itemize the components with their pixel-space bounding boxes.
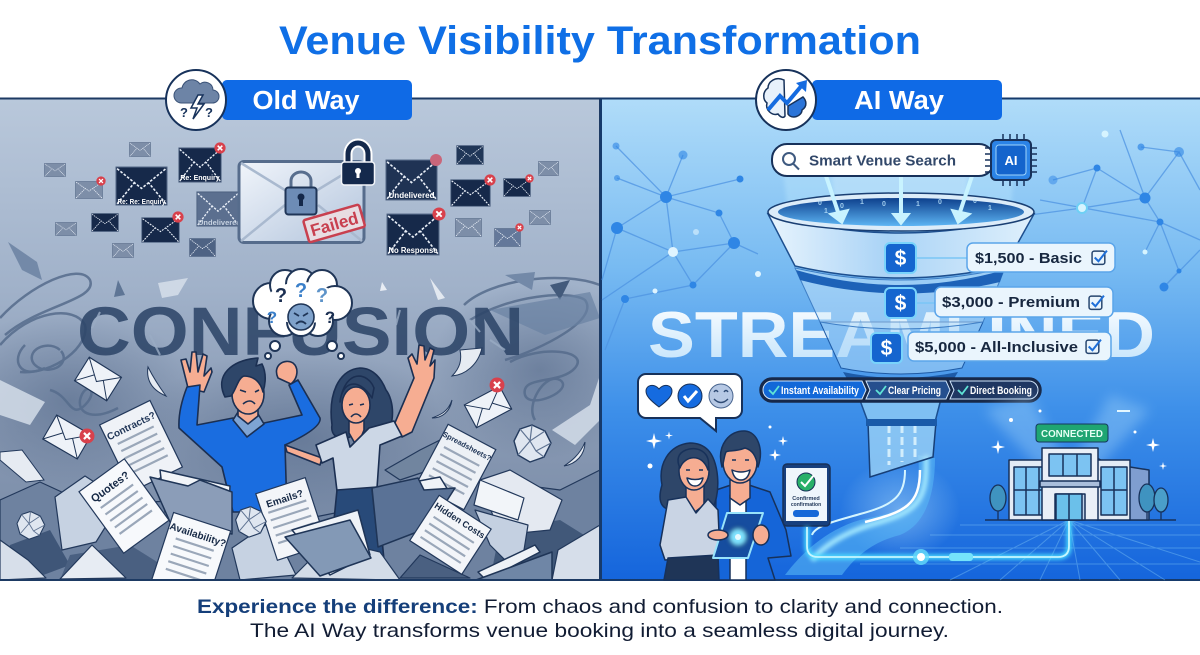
document: Emails?: Emails? — [265, 488, 305, 511]
document: Emails? — [256, 478, 327, 560]
price tier: Basic — [885, 243, 1115, 273]
badge: ai way: AI Way — [854, 87, 945, 115]
labelled envelope: Re: Re: Enquiry: Re: Re: Enquiry — [118, 199, 166, 206]
binary rain and arrows: 0 — [840, 203, 844, 210]
binary rain and arrows: 1 — [916, 201, 920, 208]
sweater — [179, 380, 320, 512]
icon: AI chip: AI — [1004, 153, 1018, 168]
thought bubble — [253, 269, 352, 359]
labelled envelope: Re: Enquiry — [179, 142, 226, 182]
word: STREAMLINED: STREAMLINED — [648, 298, 1155, 371]
price tier: Basic: $ — [895, 247, 907, 270]
back pile of papers — [0, 440, 600, 580]
price tier: All-Inclusive — [871, 332, 1111, 363]
document: Quotes? — [79, 459, 169, 553]
price tier: All-Inclusive: $5,000 - All-Inclusive — [915, 339, 1078, 356]
tablet — [708, 513, 769, 558]
man — [715, 431, 791, 580]
venue sparkles — [991, 410, 1167, 470]
badge: old way: Old Way — [252, 87, 360, 115]
thought bubble: ? — [275, 285, 287, 307]
benefits pill bar: Direct Booking — [970, 385, 1032, 397]
sparkles — [646, 426, 788, 468]
floor perspective grid — [860, 520, 1200, 580]
document: Contracts? — [100, 400, 182, 492]
benefits pill bar: Instant Availability — [781, 385, 860, 397]
icon: AI chip — [985, 134, 1037, 186]
binary rain and arrows: 1 — [860, 199, 864, 206]
labelled envelope: No Response: No Response — [388, 246, 438, 255]
icon: magnifier — [783, 153, 799, 170]
thought bubble: ? — [316, 285, 328, 307]
icon: storm cloud: ? — [205, 105, 213, 120]
connected badge — [1036, 424, 1108, 442]
badge: old way — [166, 70, 412, 130]
benefits pill bar — [760, 378, 1041, 402]
pants — [330, 487, 384, 560]
crumpled paper balls — [17, 425, 551, 539]
crumpled ball centre — [236, 507, 266, 537]
folder centre — [285, 510, 371, 576]
network left — [602, 142, 761, 350]
undelivered ghost envelope — [197, 192, 241, 227]
document: Hidden Costs: Hidden Costs — [433, 501, 487, 541]
phone confirmation card: confirmation — [791, 502, 821, 508]
caption line 2: The AI Way transforms venue booking into a seamless digital journey. — [250, 620, 949, 642]
venue building — [985, 448, 1176, 520]
folder bottom right — [476, 545, 552, 580]
trees — [990, 484, 1168, 520]
reaction speech bubble — [638, 374, 742, 431]
storm haze behind the scene — [0, 297, 599, 502]
binary rain and arrows: 1 — [988, 205, 992, 212]
fist — [276, 361, 297, 384]
folder right — [372, 477, 455, 547]
person: stressed man — [179, 352, 320, 512]
price tier: Basic: $1,500 - Basic — [975, 250, 1082, 267]
grey background envelopes — [44, 142, 559, 258]
tee — [316, 421, 402, 491]
caption line 1: Experience the difference: From chaos and confusion to clarity and connection. — [197, 596, 1003, 618]
dark envelopes — [92, 146, 534, 242]
connection line — [807, 520, 1069, 565]
network right — [1030, 130, 1200, 292]
shirt collar — [233, 412, 264, 437]
word: CONFUSION: CONFUSION — [77, 293, 524, 370]
folder left — [150, 470, 232, 534]
binary rain and arrows: 0 — [973, 198, 977, 205]
woman — [660, 443, 720, 580]
binary rain and arrows: 0 — [938, 199, 942, 206]
thought bubble: ? — [267, 308, 277, 327]
search bar: Smart Venue Search — [809, 154, 956, 170]
word: CONFUSION — [80, 306, 519, 356]
labelled envelope: Re: Re: Enquiry — [116, 167, 167, 206]
venue glow rays — [985, 395, 1150, 500]
benefits pill bar: Clear Pricing — [888, 385, 941, 397]
lower funnel stream — [785, 455, 960, 575]
labelled envelope: No Response — [387, 207, 446, 255]
badge: ai way — [756, 70, 1002, 130]
undelivered ghost envelope: Undelivered — [198, 218, 241, 227]
hair back — [331, 368, 392, 438]
binary rain and arrows: 1 — [824, 208, 828, 215]
document: Availability?: Availability? — [168, 521, 227, 550]
search bar — [772, 144, 994, 176]
price tier: Premium: $ — [895, 292, 907, 315]
debris shards — [8, 242, 600, 335]
failed stamp: Failed — [308, 209, 361, 240]
price tier: All-Inclusive: $ — [881, 337, 893, 360]
price tier: Premium: $3,000 - Premium — [942, 294, 1080, 311]
funnel — [768, 193, 1034, 477]
document: Spreadsheets?: Spreadsheets? — [441, 430, 493, 463]
phone confirmation card — [783, 464, 830, 526]
price tier: Premium — [885, 287, 1113, 318]
padlock icon — [342, 143, 374, 185]
fringe — [340, 376, 374, 402]
labelled envelope: Undelivered — [386, 154, 442, 200]
panel: ai way — [601, 98, 1200, 580]
icon: storm cloud: ? — [180, 105, 188, 120]
document: Quotes?: Quotes? — [89, 469, 132, 505]
document: Availability? — [150, 512, 231, 603]
binary rain and arrows — [818, 176, 992, 224]
document: Spreadsheets? — [416, 424, 496, 510]
thought bubble: ? — [295, 280, 307, 302]
document: Contracts?: Contracts? — [105, 410, 158, 443]
document: Hidden Costs — [410, 495, 491, 574]
icon: brain with growth arrow — [756, 70, 816, 130]
couple — [660, 431, 791, 580]
title: Venue Visibility Transformation — [279, 19, 921, 63]
panel: old way — [0, 98, 600, 581]
labelled envelope: Undelivered: Undelivered — [388, 191, 435, 200]
light beams into funnel — [780, 150, 1015, 225]
raised arm — [394, 345, 435, 437]
thought bubble: ? — [325, 308, 335, 327]
phone confirmation card: Confirmed — [792, 496, 820, 502]
hand left — [181, 352, 212, 392]
person: stressed woman — [285, 345, 435, 560]
caption — [197, 596, 1003, 642]
front pile of papers — [0, 470, 600, 580]
binary rain and arrows: 0 — [882, 201, 886, 208]
binary rain and arrows: 0 — [818, 200, 822, 207]
central locked envelope — [239, 162, 364, 242]
scribble whirlwinds — [0, 274, 600, 420]
flying white envelopes — [0, 348, 585, 482]
arm to man — [285, 445, 322, 465]
panel frame — [0, 98, 600, 580]
icon: storm cloud — [166, 70, 226, 130]
connected badge: CONNECTED — [1041, 428, 1103, 440]
labelled envelope: Re: Enquiry: Re: Enquiry — [180, 175, 220, 182]
